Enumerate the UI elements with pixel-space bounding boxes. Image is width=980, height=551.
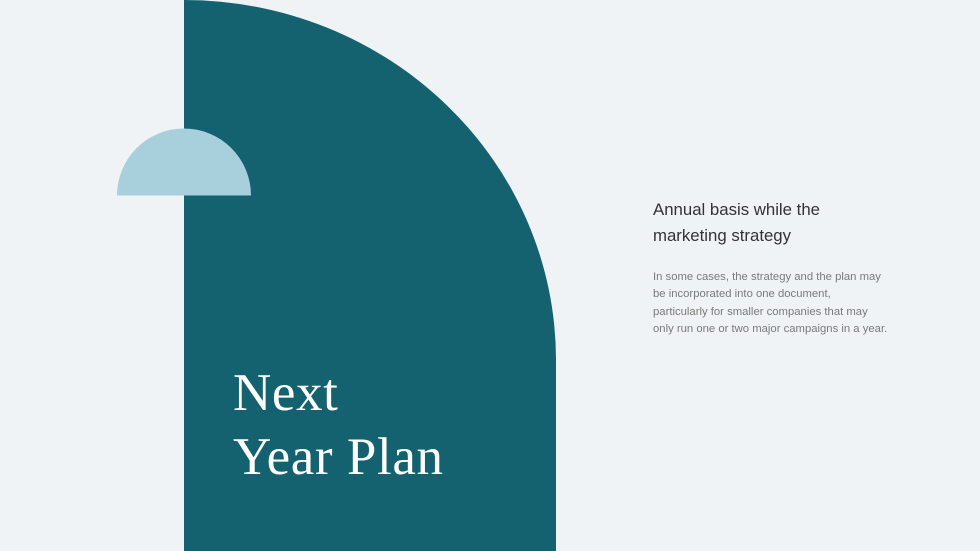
body text: In some cases, the strategy and the plan may (653, 271, 881, 283)
title: Next (233, 364, 338, 422)
title (233, 364, 444, 486)
heading: Annual basis while the (653, 200, 820, 219)
body text: be incorporated into one document, (653, 288, 831, 300)
body text: only run one or two major campaigns in a year. (653, 323, 887, 335)
body text (653, 271, 887, 335)
light blue semicircle (117, 128, 251, 196)
heading (653, 200, 820, 245)
heading: marketing strategy (653, 226, 791, 245)
body text: particularly for smaller companies that may (653, 306, 868, 318)
title: Year Plan (233, 428, 444, 486)
